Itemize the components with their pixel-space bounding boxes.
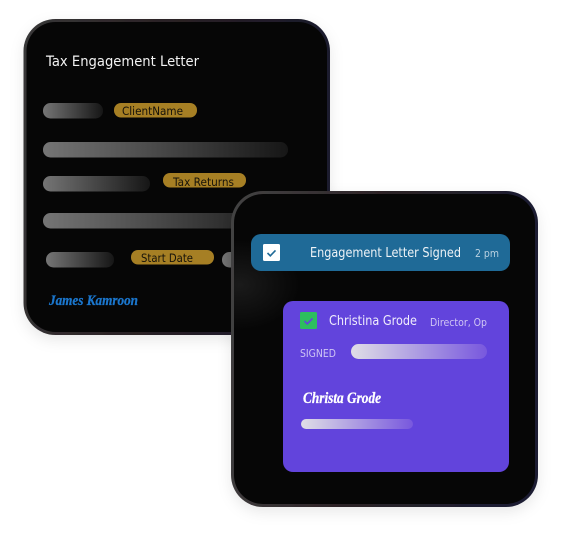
placeholder bar 5	[46, 252, 114, 268]
signer name: Christina Grode	[329, 314, 417, 329]
heading: tax engagement letter: Tax Engagement Letter	[45, 54, 199, 70]
signer role: Director, Op	[430, 316, 487, 329]
status bar: engagement letter signed	[251, 234, 510, 271]
icon: white checkbox	[263, 244, 280, 261]
icon: green checkbox	[300, 312, 317, 329]
placeholder bar 1	[43, 103, 103, 118]
status bar: engagement letter signed: 2 pm	[475, 247, 499, 260]
field pill: start date	[131, 250, 214, 265]
placeholder bar 4	[43, 213, 288, 228]
field pill: tax returns: Tax Returns	[172, 175, 234, 189]
placeholder bar 6	[222, 252, 290, 268]
placeholder bar 2	[43, 142, 288, 158]
panel: signed confirmation card	[228, 191, 540, 514]
signed label: SIGNED	[300, 348, 336, 360]
status bar: engagement letter signed: Engagement Letter Signed	[310, 246, 461, 261]
signature: james kamroon: James Kamroon	[48, 293, 138, 309]
signature underline bar	[301, 419, 413, 429]
signature: christa grode: Christa Grode	[303, 390, 381, 407]
panel: tax engagement letter card	[24, 19, 330, 335]
panel: signer card	[283, 301, 509, 472]
signed value bar	[351, 344, 487, 359]
field pill: start date: Start Date	[141, 251, 193, 265]
placeholder bar 3	[43, 176, 150, 192]
field pill: client name: ClientName	[122, 104, 183, 118]
